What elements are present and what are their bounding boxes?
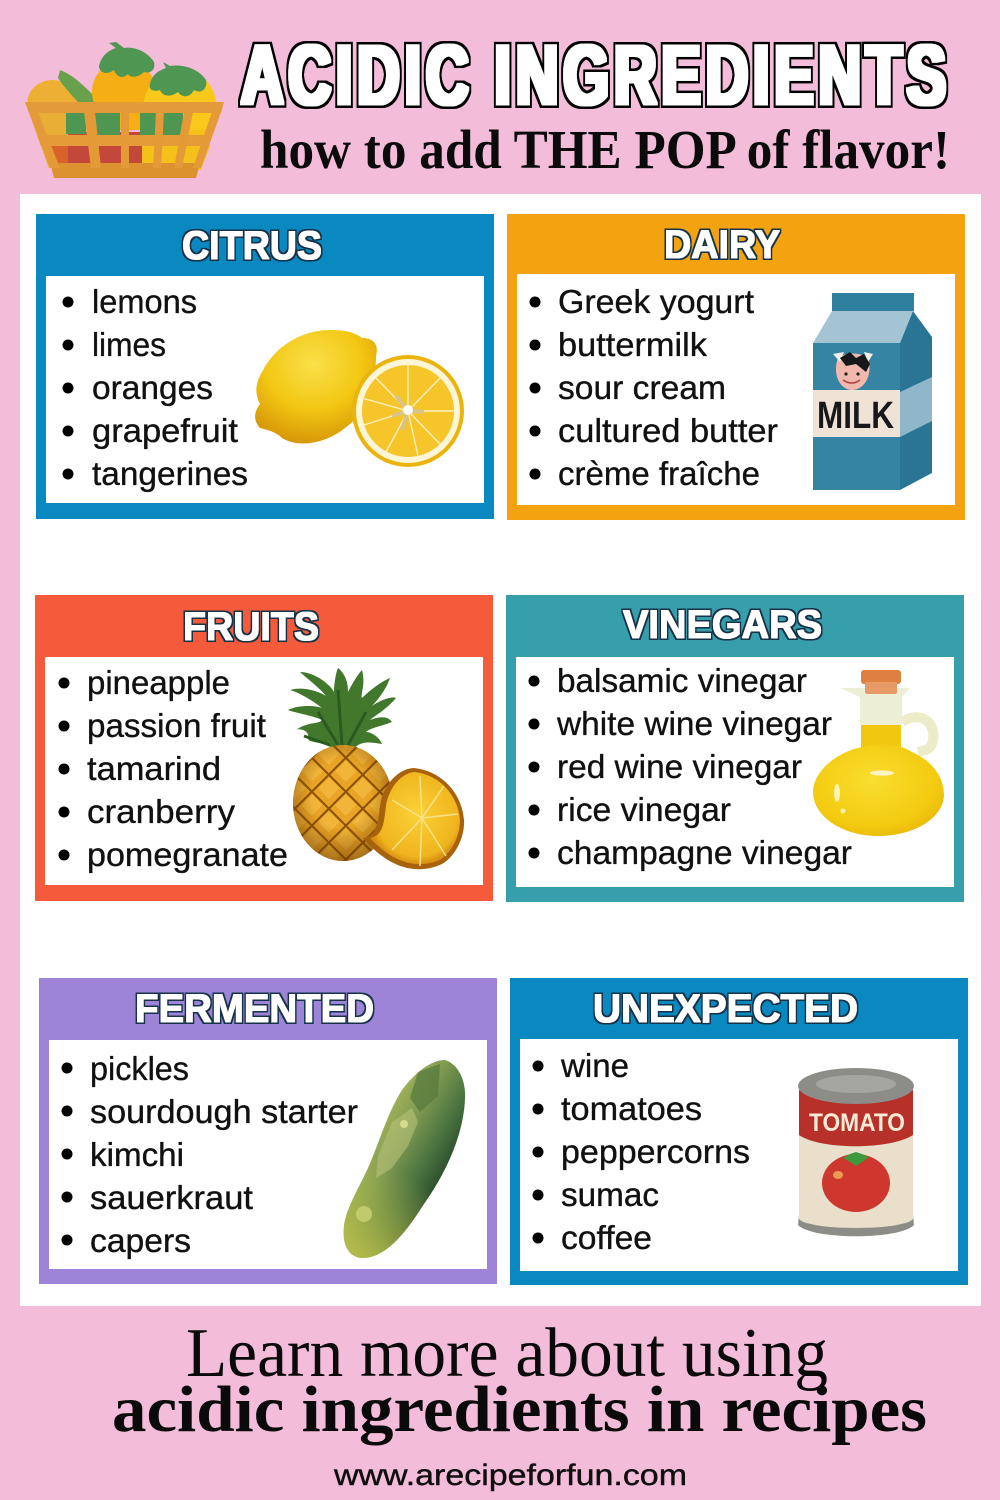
- label: tomato: TOMATO: [809, 1109, 905, 1137]
- list: fermented: sauerkraut: [90, 1179, 253, 1216]
- list: fruits: pomegranate: [87, 836, 288, 873]
- heading: fermented: FERMENTED: [135, 987, 374, 1031]
- icon: pickle: [340, 1060, 465, 1260]
- panel: unexpected: [510, 978, 968, 1285]
- list: dairy: crème fraîche: [558, 455, 760, 492]
- list: vinegars: champagne vinegar: [557, 834, 852, 871]
- heading: vinegars: VINEGARS: [623, 603, 822, 647]
- heading: fruits: FRUITS: [183, 605, 319, 649]
- list: vinegars: red wine vinegar: [557, 748, 802, 785]
- list: vinegars: [528, 662, 852, 871]
- list: citrus: [62, 283, 248, 492]
- list: citrus: oranges: [92, 369, 213, 406]
- heading: dairy: DAIRY: [664, 223, 780, 267]
- list: unexpected: peppercorns: [561, 1133, 750, 1170]
- white content panel: [20, 194, 981, 1306]
- list: fruits: passion fruit: [87, 707, 266, 744]
- list: dairy: Greek yogurt: [558, 283, 754, 320]
- icon: oil jar: [813, 670, 944, 836]
- list: fermented: capers: [90, 1222, 191, 1259]
- list: citrus: lemons: [92, 283, 197, 320]
- list: fermented: sourdough starter: [90, 1093, 358, 1130]
- list: unexpected: tomatoes: [561, 1090, 702, 1127]
- panel: fermented: [39, 978, 497, 1284]
- icon: pineapple: [288, 668, 464, 869]
- list: vinegars: balsamic vinegar: [557, 662, 807, 699]
- list: unexpected: coffee: [561, 1219, 652, 1256]
- list: unexpected: wine: [560, 1047, 629, 1084]
- footer heading line 2: acidic ingredients in recipes: [112, 1373, 927, 1446]
- list: fruits: [58, 664, 288, 873]
- panel: fruits: [35, 595, 493, 901]
- list: dairy: buttermilk: [558, 326, 708, 363]
- icon: milk carton: [813, 293, 932, 490]
- heading: citrus: CITRUS: [182, 224, 322, 268]
- icon: tomato can: [798, 1068, 914, 1236]
- list: fruits: tamarind: [87, 750, 221, 787]
- list: dairy: sour cream: [558, 369, 726, 406]
- list: citrus: tangerines: [92, 455, 248, 492]
- panel: citrus: [36, 214, 494, 519]
- list: vinegars: rice vinegar: [557, 791, 731, 828]
- subtitle: how to add THE POP of flavor!: [260, 119, 950, 180]
- icon: lemons: [255, 330, 464, 467]
- list: fermented: pickles: [90, 1050, 189, 1087]
- list: dairy: cultured butter: [558, 412, 778, 449]
- panel: dairy: [507, 214, 965, 520]
- icon: basket of vegetables: [25, 42, 224, 178]
- list: fermented: kimchi: [90, 1136, 184, 1173]
- list: fruits: cranberry: [87, 793, 236, 830]
- list: citrus: limes: [92, 326, 166, 363]
- footer heading line 1: Learn more about using: [186, 1315, 828, 1392]
- list: fruits: pineapple: [87, 664, 230, 701]
- website url: www.arecipeforfun.com: [333, 1459, 687, 1492]
- panel: vinegars: [506, 595, 964, 902]
- label: milk: MILK: [817, 395, 894, 437]
- heading: unexpected: UNEXPECTED: [593, 987, 858, 1031]
- list: dairy: [530, 283, 778, 492]
- list: vinegars: white wine vinegar: [556, 705, 832, 742]
- list: citrus: grapefruit: [92, 412, 238, 449]
- list: unexpected: sumac: [561, 1176, 659, 1213]
- list: unexpected: [532, 1047, 750, 1256]
- list: fermented: [62, 1050, 358, 1259]
